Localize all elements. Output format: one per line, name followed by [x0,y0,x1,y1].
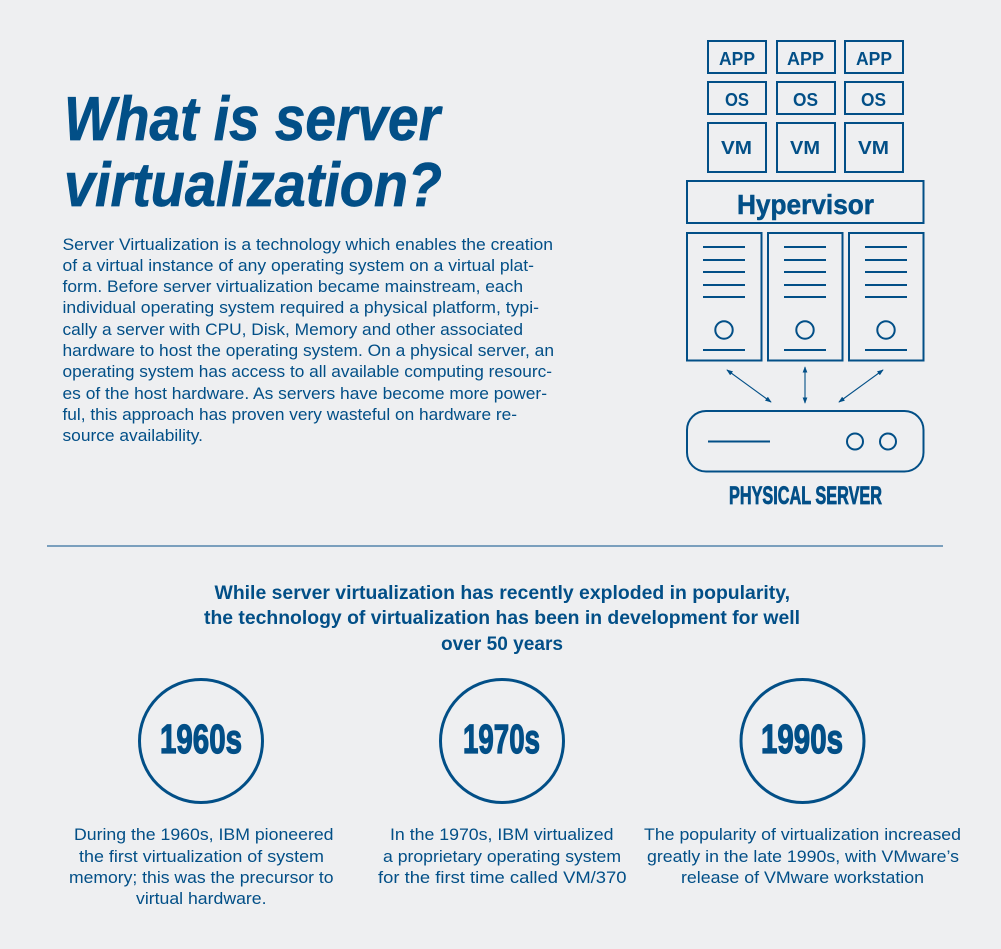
server unit 2 [768,233,842,360]
APP row: APP [787,48,824,69]
VM row: VM [790,137,820,158]
year circle 1990s: 1990s [761,716,843,762]
arrow: middle server to physical server [804,367,806,403]
physical server unit [687,411,924,472]
server unit 3 [849,233,924,360]
diagram: server virtualization stack [687,41,924,510]
OS row: OS [725,89,749,110]
intro text block: operating system has access to all available computing resourc- [62,362,552,381]
intro text block: cally a server with CPU, Disk, Memory and other associated [62,320,523,339]
description 1970s: for the first time called VM/370 [378,868,626,887]
description 1990s: greatly in the late 1990s, with VMware’s [647,847,959,866]
timeline heading: the technology of virtualization has been in development for well [204,607,800,629]
description 1960s: the first virtualization of system [79,847,324,866]
description 1970s: In the 1970s, IBM virtualized [390,825,614,844]
arrow: right server to physical server [839,370,883,402]
physical server label: PHYSICAL SERVER [729,482,882,510]
title: What is server [64,85,443,154]
intro text block: individual operating system required a physical platform, typi- [62,298,539,317]
description 1970s [378,825,626,887]
APP row [708,41,903,73]
timeline item: 1960s [69,680,334,908]
OS row [708,82,903,114]
OS row: OS [861,89,886,110]
hypervisor bar [687,181,924,223]
intro text block [62,235,554,445]
description 1960s: memory; this was the precursor to [69,868,334,887]
VM row [708,123,903,172]
timeline heading: While server virtualization has recently exploded in popularity, [214,582,790,604]
title: virtualization? [64,151,442,220]
year circle 1960s [140,680,262,802]
year circle 1970s [440,680,564,802]
APP row: APP [856,48,892,69]
description 1990s: release of VMware workstation [681,868,924,887]
VM row: VM [858,137,889,158]
intro text block: source availability. [62,426,203,445]
description 1960s: virtual hardware. [136,889,266,908]
intro text block: of a virtual instance of any operating system on a virtual plat- [62,256,534,275]
hypervisor bar: Hypervisor [737,189,874,220]
year circle 1970s: 1970s [463,716,540,762]
description 1970s: a proprietary operating system [383,847,621,866]
description 1960s: During the 1960s, IBM pioneered [74,825,334,844]
timeline heading [204,582,800,655]
title [64,85,443,220]
timeline heading: over 50 years [441,633,563,655]
intro text block: Server Virtualization is a technology which enables the creation [62,235,553,254]
OS row: OS [793,89,818,110]
server unit 1 [687,233,762,360]
intro text block: hardware to host the operating system. On a physical server, an [62,341,554,360]
description 1990s: The popularity of virtualization increased [644,825,961,844]
timeline item: 1990s [644,680,961,887]
year circle 1960s: 1960s [160,716,242,762]
intro text block: es of the host hardware. As servers have become more power- [62,384,547,403]
description 1960s [69,825,334,908]
VM row: VM [721,137,752,158]
timeline item: 1970s [378,680,626,887]
intro text block: ful, this approach has proven very wasteful on hardware re- [62,405,517,424]
APP row: APP [719,48,755,69]
arrow: left server to physical server [727,370,771,402]
intro text block: form. Before server virtualization became mainstream, each [62,277,523,296]
year circle 1990s [741,680,864,802]
description 1990s [644,825,961,887]
